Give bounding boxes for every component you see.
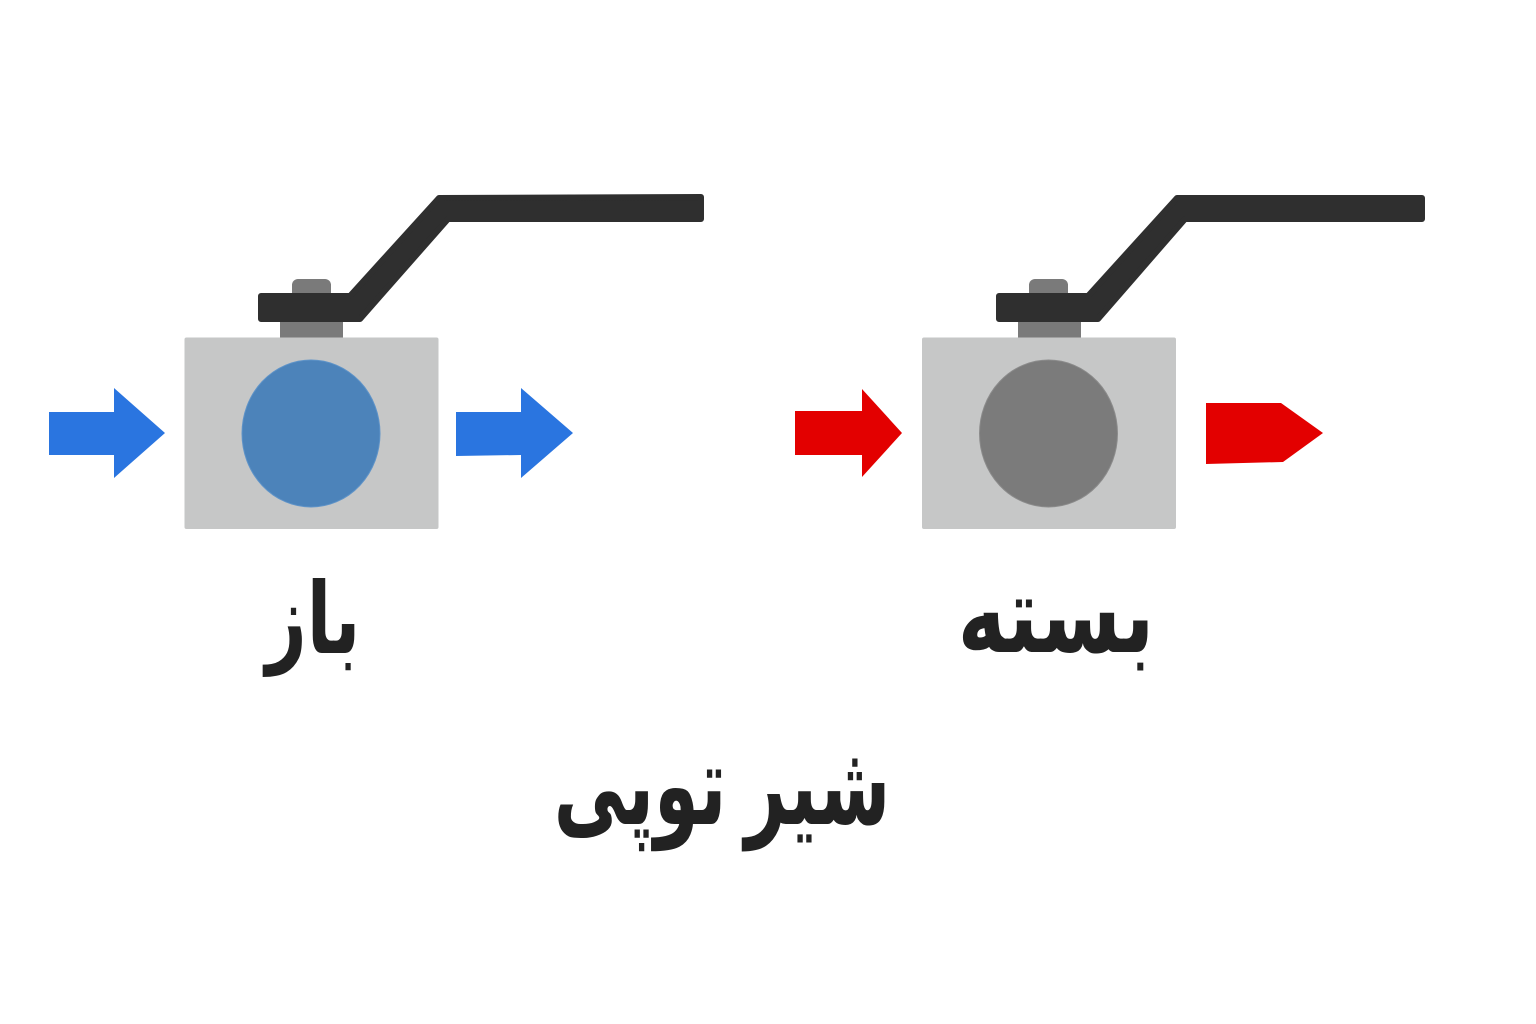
closed valve <box>795 198 1422 529</box>
open ball <box>242 360 380 507</box>
closed ball <box>980 360 1118 507</box>
label: closed: بسته <box>958 552 1154 678</box>
icon: inlet arrow red <box>795 389 902 477</box>
title: ball valve: شیر توپی <box>554 722 890 851</box>
open valve stem <box>280 279 343 340</box>
icon: blocked outlet arrow red <box>1206 403 1323 464</box>
open valve handle <box>261 197 701 319</box>
icon: inlet arrow blue <box>49 388 165 478</box>
closed valve body <box>922 338 1176 529</box>
label: open: باز <box>262 562 360 677</box>
open valve <box>49 197 701 529</box>
closed valve stem <box>1018 279 1081 340</box>
open valve body <box>184 338 438 529</box>
icon: outlet arrow blue <box>456 388 573 478</box>
closed valve handle <box>999 198 1422 319</box>
